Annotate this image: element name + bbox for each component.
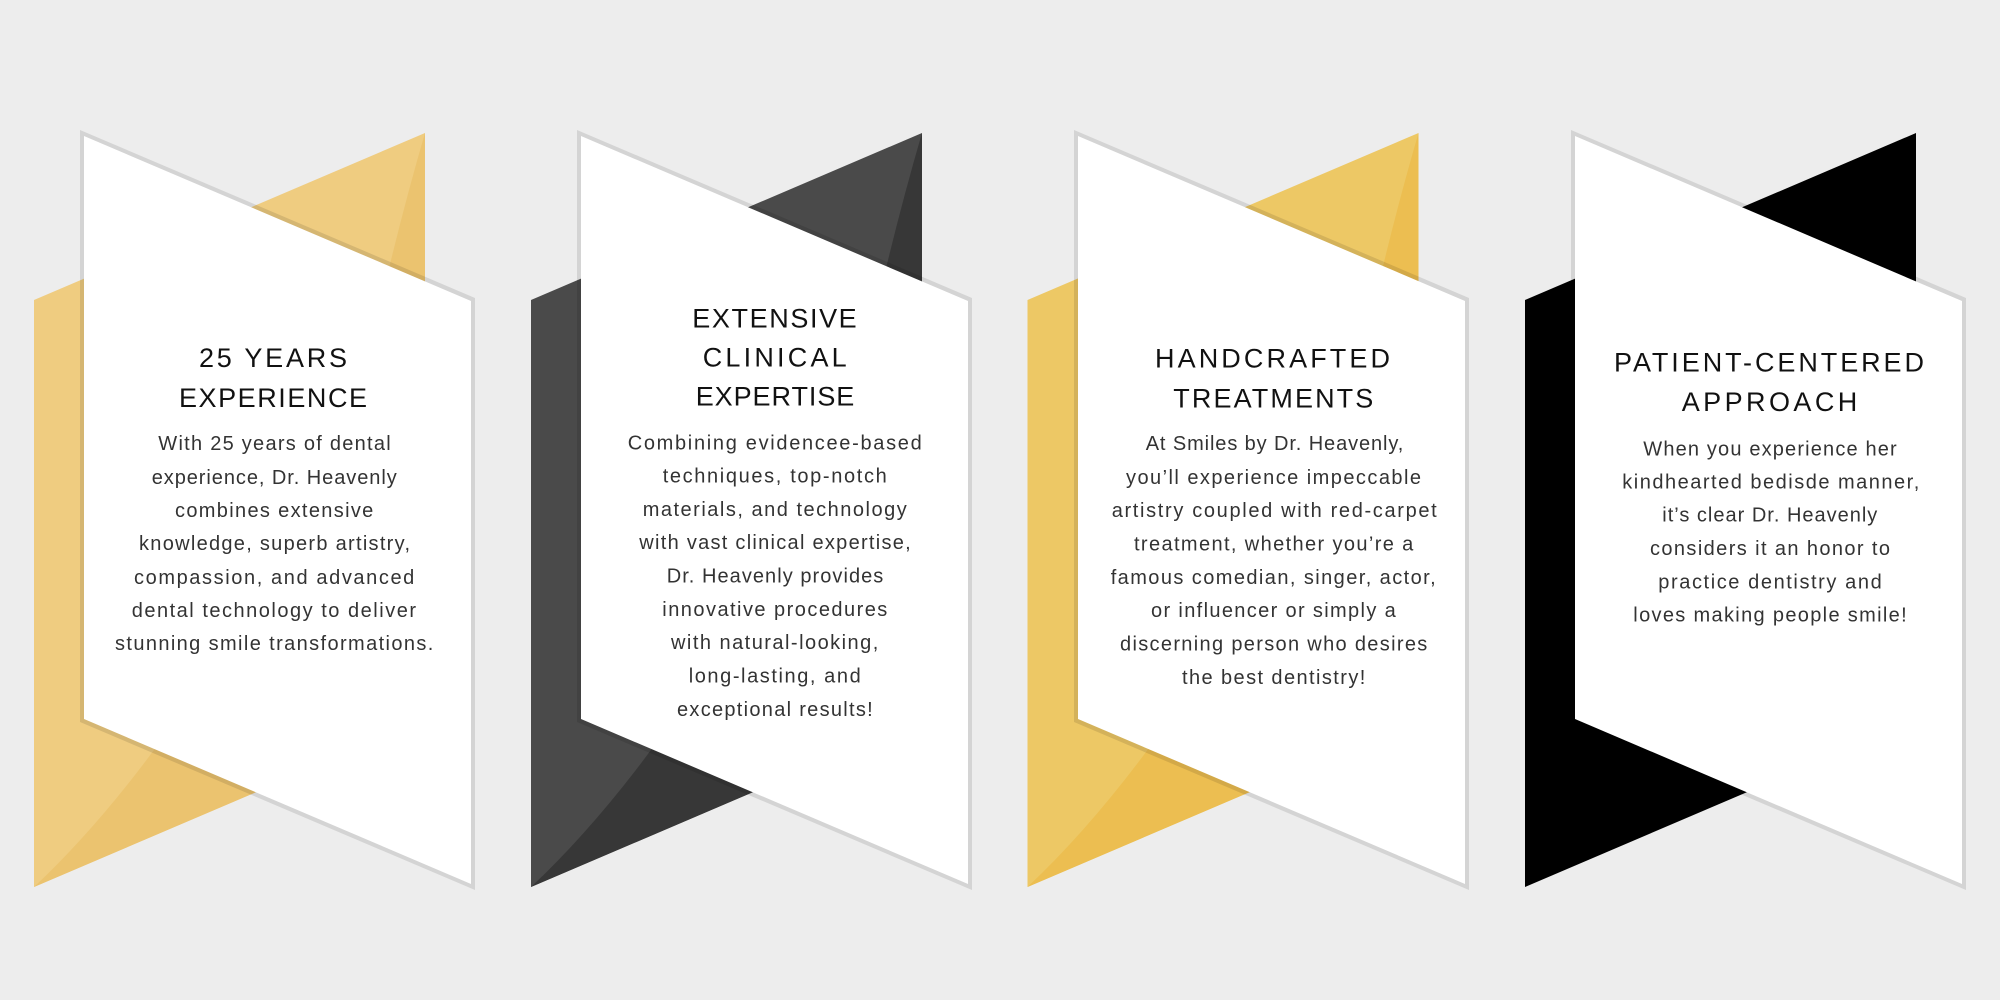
body text: kindhearted bedisde manner, (1622, 471, 1919, 493)
white card with grey border (80, 130, 475, 890)
body text: exceptional results! (677, 699, 873, 721)
charcoal back shape (531, 133, 922, 887)
panel: handcrafted treatments (1028, 130, 1469, 890)
body text: you’ll experience impeccable (1126, 467, 1421, 489)
heading: TREATMENTS (1173, 383, 1373, 413)
body text: With 25 years of dental (158, 433, 391, 455)
yellow back shape (1028, 133, 1418, 887)
body text (628, 432, 922, 721)
body text: compassion, and advanced (134, 567, 414, 589)
heading (1614, 348, 1924, 417)
body text: experience, Dr. Heavenly (152, 467, 397, 489)
body text: famous comedian, singer, actor, (1111, 567, 1436, 589)
body text: combines extensive (175, 500, 373, 522)
black back shape (1525, 133, 1916, 887)
heading (1155, 343, 1390, 413)
body text: dental technology to deliver (132, 600, 416, 622)
body text: techniques, top-notch (663, 466, 887, 488)
heading (692, 304, 857, 412)
body text: materials, and technology (643, 499, 907, 521)
white card with grey border (1571, 130, 1966, 890)
gold back shape (34, 133, 425, 887)
body text: it’s clear Dr. Heavenly (1662, 505, 1877, 527)
body text (1111, 433, 1437, 689)
body text: Dr. Heavenly provides (667, 566, 883, 588)
body text: the best dentistry! (1182, 667, 1365, 689)
heading: EXPERTISE (696, 382, 854, 412)
body text: When you experience her (1643, 438, 1897, 460)
heading: EXPERIENCE (179, 383, 367, 413)
body text: or influencer or simply a (1151, 600, 1397, 622)
body text: innovative procedures (662, 599, 887, 621)
panel: patient-centered approach (1525, 130, 1966, 890)
body text: considers it an honor to (1650, 538, 1890, 560)
body text: discerning person who desires (1120, 634, 1427, 656)
body text: loves making people smile! (1633, 605, 1907, 627)
body text: with natural-looking, (670, 632, 878, 654)
heading: EXTENSIVE (692, 304, 857, 334)
white card with grey border (577, 130, 972, 890)
heading: 25 YEARS (199, 343, 347, 373)
heading: PATIENT-CENTERED (1614, 348, 1924, 378)
body text: practice dentistry and (1658, 571, 1882, 593)
heading: HANDCRAFTED (1155, 343, 1390, 373)
panel: 25 years experience (34, 130, 475, 890)
white card with grey border (1074, 130, 1469, 890)
body text: long-lasting, and (689, 666, 861, 688)
heading: CLINICAL (703, 343, 847, 373)
body text: At Smiles by Dr. Heavenly, (1146, 433, 1403, 455)
body text: Combining evidencee-based (628, 432, 922, 454)
body text: with vast clinical expertise, (638, 532, 911, 554)
body text: stunning smile transformations. (115, 633, 433, 655)
body text: artistry coupled with red-carpet (1112, 500, 1437, 522)
panel: extensive clinical expertise (531, 130, 972, 890)
body text: knowledge, superb artistry, (139, 533, 410, 555)
body text: treatment, whether you’re a (1134, 534, 1414, 556)
body text (1622, 438, 1919, 627)
heading: APPROACH (1682, 387, 1857, 417)
body text (115, 433, 433, 655)
heading (179, 343, 367, 413)
